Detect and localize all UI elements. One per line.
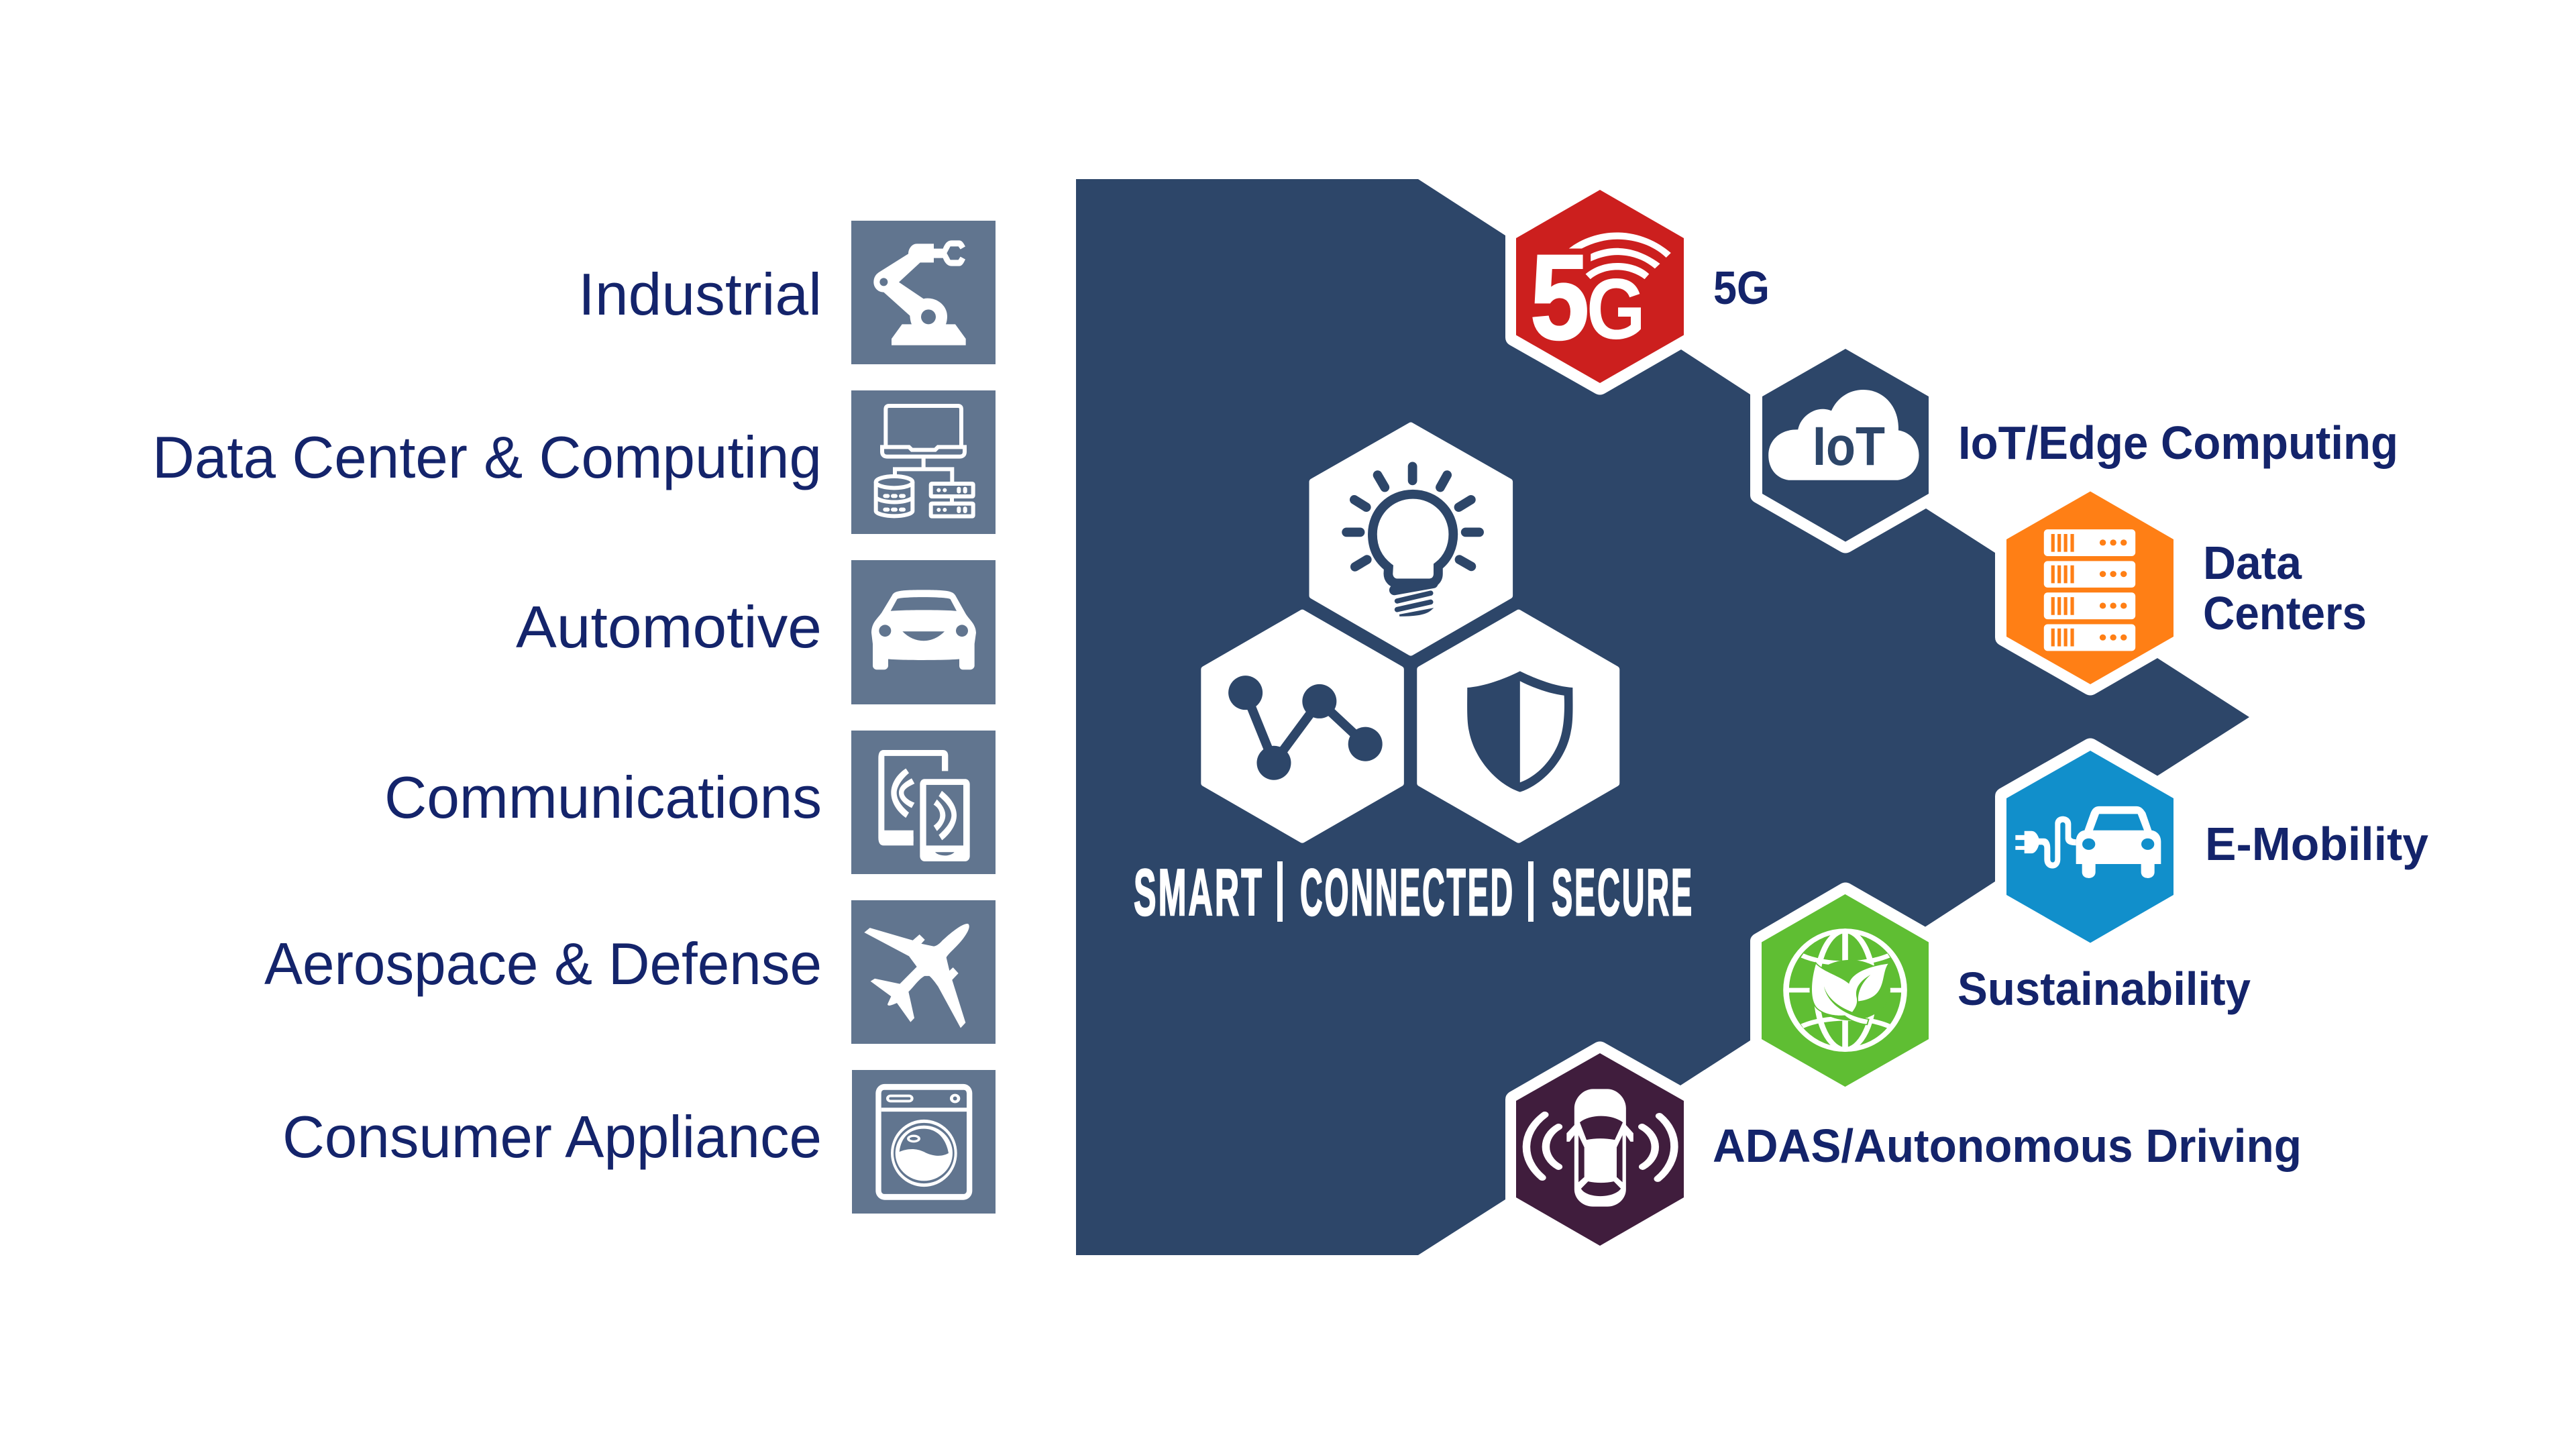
tile: automotive xyxy=(851,560,996,704)
label: Consumer Appliance: Consumer Appliance xyxy=(282,1104,822,1170)
icon: 5G logo with signal arcs: G xyxy=(1587,262,1646,358)
icon: lightbulb xyxy=(1346,466,1479,615)
label: Data Center & Computing: Data Center & Computing xyxy=(152,424,822,490)
hexagon: lightbulb xyxy=(1313,426,1509,652)
icon: 5G logo with signal arcs xyxy=(1530,230,1671,365)
hexagon: 5G xyxy=(1516,190,1684,383)
icon: linked nodes xyxy=(1228,676,1383,780)
label: Automotive: Automotive xyxy=(516,594,822,660)
tile: data center and computing xyxy=(851,390,996,534)
icon: washing machine xyxy=(875,1084,972,1200)
icon: shield xyxy=(1467,672,1573,792)
hexagon: Data Centers xyxy=(2006,491,2174,684)
label: Data Centers: Data xyxy=(2203,537,2302,589)
hexagon: Sustainability xyxy=(1762,894,1929,1087)
text: SECURE xyxy=(1552,855,1694,929)
label: Communications: Communications xyxy=(384,764,822,830)
label: Data Centers xyxy=(2203,537,2367,639)
tagline: SMART | CONNECTED | SECURE: SMART xyxy=(1134,855,1264,929)
icon: airplane xyxy=(864,924,969,1028)
tile: consumer appliance xyxy=(852,1070,996,1214)
hexagon: connected path xyxy=(1204,613,1401,840)
tile: aerospace and defense xyxy=(851,900,996,1044)
icon: car with sensor waves xyxy=(1526,1089,1674,1207)
icon: IoT cloud xyxy=(1768,390,1919,480)
tile: industrial robot xyxy=(851,221,996,364)
label: Data Centers: Centers xyxy=(2203,587,2367,639)
label: Industrial: Industrial xyxy=(578,261,822,327)
left labels column xyxy=(152,261,822,1170)
label: Sustainability: Sustainability xyxy=(1957,963,2251,1015)
icon: 5G logo with signal arcs: 5 xyxy=(1530,230,1589,365)
icon: server rack xyxy=(2044,529,2135,651)
hexagon: IoT xyxy=(1762,349,1929,542)
center emblem: three white hexagons xyxy=(1204,426,1616,840)
label: ADAS/Autonomous Driving: ADAS/Autonomous Driving xyxy=(1713,1120,2302,1172)
tagline: SMART | CONNECTED | SECURE xyxy=(1134,855,1694,929)
icon: electric car with plug xyxy=(2015,806,2161,878)
label: IoT/Edge Computing: IoT/Edge Computing xyxy=(1958,417,2398,469)
hexagon: shield xyxy=(1420,613,1616,840)
icon: IoT cloud: IoT xyxy=(1813,416,1885,477)
tagline: SMART | CONNECTED | SECURE: CONNECTED xyxy=(1300,855,1515,929)
hexagon: ADAS xyxy=(1516,1053,1684,1246)
label: E-Mobility: E-Mobility xyxy=(2205,818,2428,870)
icon: car front xyxy=(871,590,976,669)
hexagon: E-Mobility xyxy=(2006,751,2174,943)
icon: globe with leaves xyxy=(1786,931,1904,1049)
icon: robot arm xyxy=(873,240,966,345)
label: 5G: 5G xyxy=(1713,262,1770,314)
panel: navy arrow-shaped central shape xyxy=(1076,179,2249,1255)
tile: communications xyxy=(851,731,996,874)
label: Aerospace & Defense: Aerospace & Defense xyxy=(264,930,822,997)
icon: laptop, database and servers xyxy=(876,406,973,517)
icon: two phones with signal waves xyxy=(878,750,970,861)
